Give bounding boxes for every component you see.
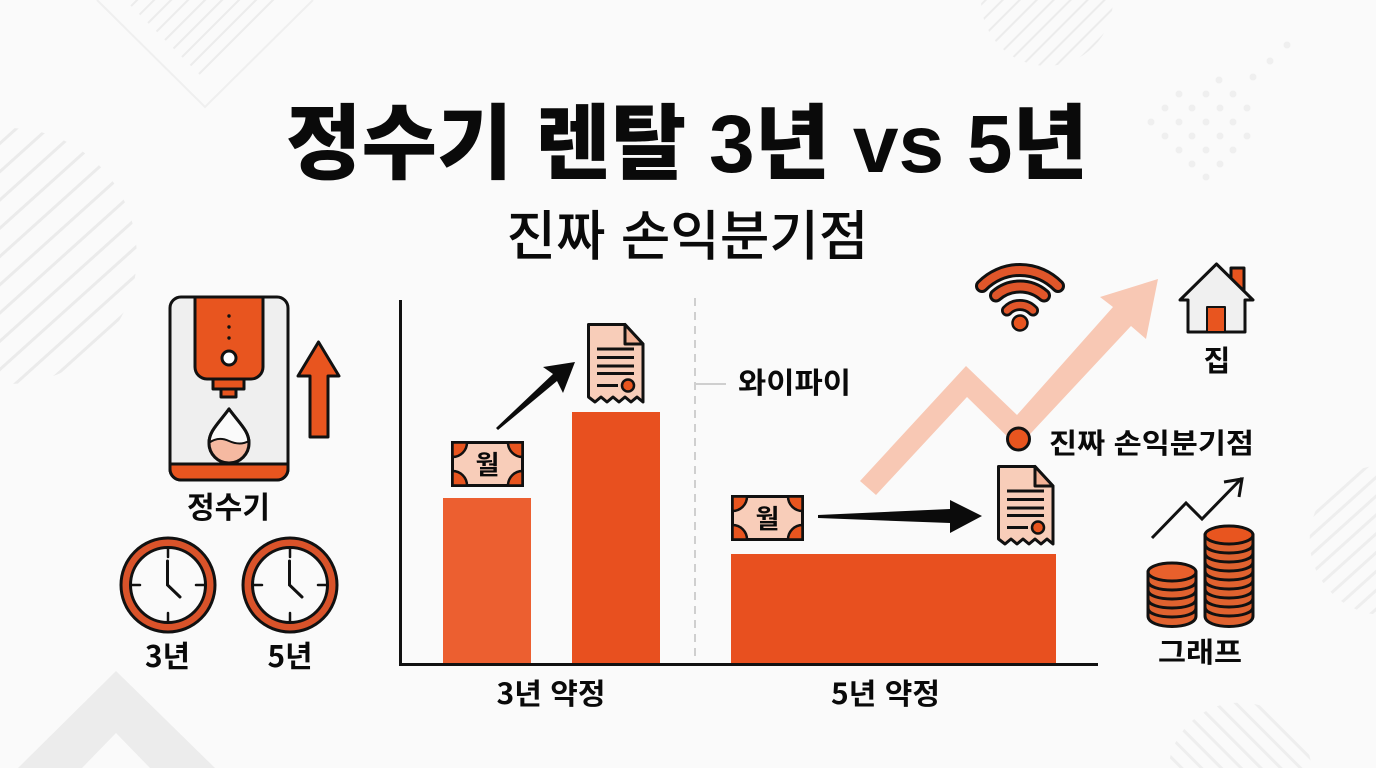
marker: break-even point xyxy=(1008,428,1030,450)
label: house: 집 xyxy=(1204,338,1230,380)
icon: clock 3 years xyxy=(121,538,215,632)
icon: house xyxy=(1180,264,1253,332)
icon: won bill 3-year xyxy=(452,442,522,486)
icon: won bill 3-year: 월 xyxy=(476,445,499,482)
icon: won bill 5-year: 월 xyxy=(756,499,779,536)
chart: bar comparison xyxy=(400,298,1098,664)
label: 5-year contract: 5년 약정 xyxy=(831,671,940,713)
icon: wifi xyxy=(982,270,1058,330)
subtitle: 진짜 손익분기점 xyxy=(506,192,868,271)
icon: clock 5 years xyxy=(243,538,337,632)
label: 5 years: 5년 xyxy=(268,632,312,676)
label: 3-year contract: 3년 약정 xyxy=(496,671,606,713)
title: 정수기 렌탈 3년 vs 5년 xyxy=(286,99,1088,190)
axes xyxy=(400,300,1098,664)
icon: growth arrow xyxy=(1152,478,1242,538)
icon: up arrow xyxy=(298,342,339,437)
label: graph: 그래프 xyxy=(1158,631,1242,671)
label: wifi: 와이파이 xyxy=(738,360,851,402)
arrow: flat cost xyxy=(818,500,982,533)
arrow: break-even trend xyxy=(860,279,1158,495)
icon: won bill 5-year xyxy=(732,496,802,540)
bar: 5-year xyxy=(731,554,1056,663)
arrow: rising cost xyxy=(496,362,575,430)
label: break-even: 진짜 손익분기점 xyxy=(1049,422,1254,462)
icon: water purifier xyxy=(170,297,288,480)
bar: 3-year low xyxy=(443,498,531,663)
label: 3 years: 3년 xyxy=(145,632,190,676)
icon: contract document 3-year xyxy=(588,324,643,402)
bar: 3-year high xyxy=(572,412,660,663)
icon: coin stacks xyxy=(1148,526,1253,626)
icon: contract document 5-year xyxy=(998,466,1053,544)
label: water purifier: 정수기 xyxy=(187,483,270,527)
